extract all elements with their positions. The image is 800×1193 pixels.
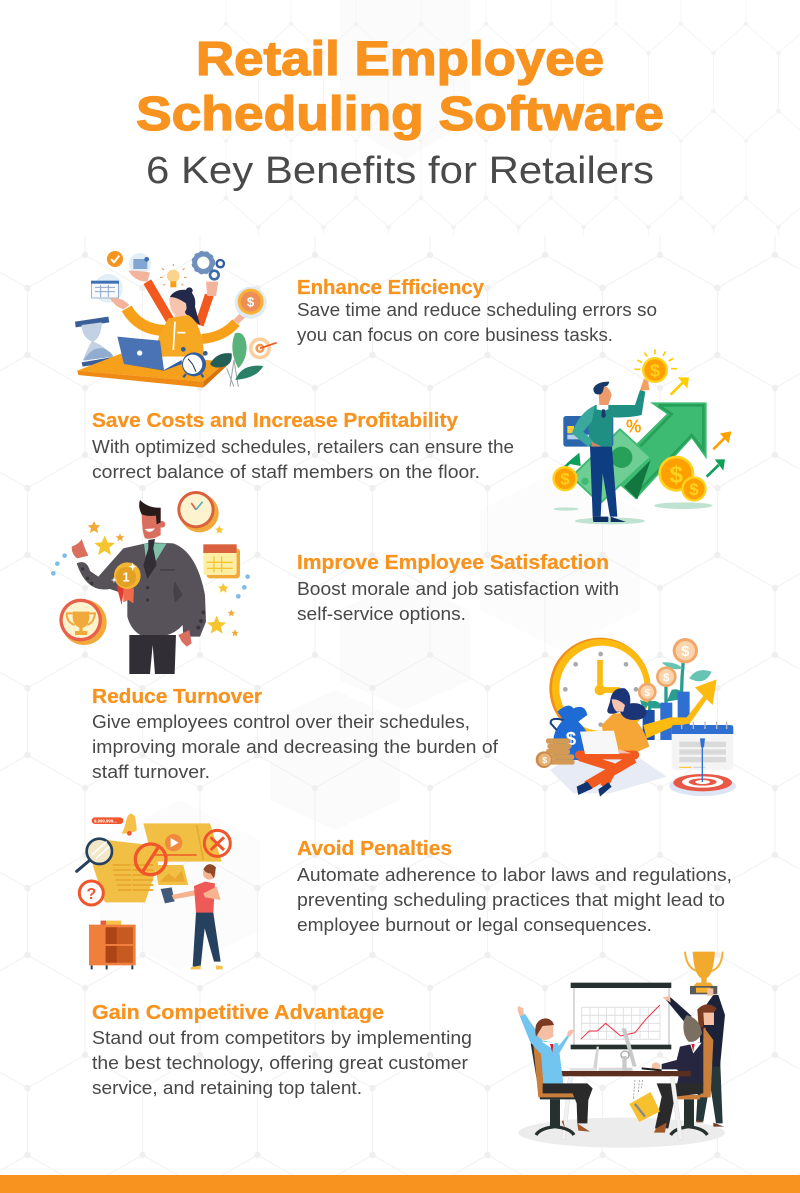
title: Scheduling Software <box>136 88 664 141</box>
body text: reduce turnover: improving morale and decreasing the burden of <box>92 736 499 757</box>
icon: man reviewing documents: 9,999,999... <box>94 818 117 823</box>
icon: man with money and growth arrow: $ <box>689 480 699 499</box>
icon: woman with laptop, clock and growth: $ <box>566 728 577 749</box>
icon: woman with laptop, clock and growth: $ <box>542 755 547 765</box>
icon: man reviewing documents <box>77 814 230 969</box>
body text: reduce turnover <box>92 711 499 782</box>
panel: save costs <box>92 349 731 524</box>
icon: man with money and growth arrow: $ <box>650 361 660 381</box>
footer bar <box>0 1175 800 1193</box>
title <box>136 33 664 192</box>
icon: man with money and growth arrow: $ <box>560 470 570 489</box>
body text: employee satisfaction <box>297 578 619 624</box>
body text: avoid penalties <box>297 864 732 935</box>
panel: avoid penalties <box>77 814 732 969</box>
heading: reduce turnover: Reduce Turnover <box>92 686 262 708</box>
body text: reduce turnover: Give employees control over their schedules, <box>92 711 470 732</box>
body text: save costs <box>92 436 514 482</box>
body text: competitive advantage: Stand out from competitors by implementing <box>92 1027 472 1048</box>
icon: woman with laptop, clock and growth <box>536 638 736 797</box>
icon: businessman with gold medal <box>51 491 250 674</box>
body text: avoid penalties: employee burnout or legal consequences. <box>297 914 652 935</box>
body text: save costs: correct balance of staff members on the floor. <box>92 461 480 482</box>
icon: multitasking woman at desk <box>75 251 277 388</box>
icon: team meeting with trophy <box>517 952 725 1148</box>
icon: man with money and growth arrow: % <box>626 416 642 437</box>
panel: employee satisfaction <box>51 491 619 674</box>
title: 6 Key Benefits for Retailers <box>146 150 654 192</box>
body text: avoid penalties: Automate adherence to labor laws and regulations, <box>297 864 732 885</box>
body text: save costs: With optimized schedules, retailers can ensure the <box>92 436 514 457</box>
icon: man with money and growth arrow <box>552 349 731 524</box>
icon: man with money and growth arrow: $ <box>670 461 683 488</box>
icon: multitasking woman at desk: $ <box>247 294 255 309</box>
heading: save costs: Save Costs and Increase Profitability <box>92 410 459 432</box>
title: Retail Employee <box>196 33 604 86</box>
body text: employee satisfaction: self-service options. <box>297 603 466 624</box>
panel: enhance efficiency <box>75 251 657 388</box>
body text: employee satisfaction: Boost morale and job satisfaction with <box>297 578 619 599</box>
panel: reduce turnover <box>92 638 736 797</box>
body text: avoid penalties: preventing scheduling practices that might lead to <box>297 889 725 910</box>
icon: woman with laptop, clock and growth: $ <box>681 644 689 660</box>
body text: enhance efficiency: you can focus on core business tasks. <box>297 324 613 345</box>
heading: avoid penalties: Avoid Penalties <box>297 838 452 860</box>
heading: employee satisfaction: Improve Employee Satisfaction <box>297 552 609 574</box>
heading: competitive advantage: Gain Competitive Advantage <box>92 1002 384 1024</box>
panel: competitive advantage <box>92 952 725 1148</box>
body text: competitive advantage: service, and retaining top talent. <box>92 1077 362 1098</box>
icon: man reviewing documents: ? <box>86 886 96 903</box>
icon: woman with laptop, clock and growth: $ <box>645 688 651 699</box>
body text: enhance efficiency <box>297 299 657 345</box>
body text: competitive advantage <box>92 1027 472 1098</box>
icon: businessman with gold medal: 1 <box>122 571 130 585</box>
body text: enhance efficiency: Save time and reduce scheduling errors so <box>297 299 657 320</box>
body text: reduce turnover: staff turnover. <box>92 761 210 782</box>
heading: enhance efficiency: Enhance Efficiency <box>297 277 485 299</box>
icon: woman with laptop, clock and growth: $ <box>663 672 670 684</box>
body text: competitive advantage: the best technology, offering great customer <box>92 1052 468 1073</box>
